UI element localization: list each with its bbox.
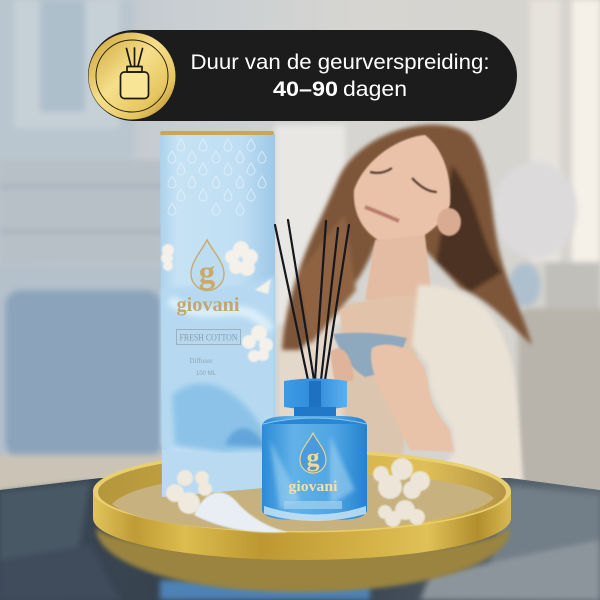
text line 2: duration: 40–90 [273,78,338,101]
hair [282,125,532,350]
volume text: 100 ML [196,371,217,377]
cotton balls right [373,458,430,527]
table [0,478,600,600]
outer wall [93,491,511,560]
sofa [0,265,600,495]
gold coin [88,32,176,120]
flowers and vase [493,162,577,307]
label box: fresh cotton: FRESH COTTON [180,332,238,342]
logo letter g on tube: g [199,255,216,291]
duration badge [88,30,517,121]
tube droplet pattern [168,139,266,215]
label box: fresh cotton [176,330,240,344]
logo droplet on bottle [300,433,326,473]
face, neck and hands [330,135,461,452]
banner pill [88,30,517,121]
cardigan and dress [278,295,425,470]
logo droplet on tube [191,240,224,291]
brand name on bottle: giovani [288,479,338,495]
tube rim [160,131,274,135]
rim [93,450,511,532]
cardboard tube: giovani fresh cotton [160,131,275,497]
cotton flowers on tube [161,241,273,362]
tray reflection [96,528,510,592]
reeds [275,220,349,380]
diffuser text: Diffuser [189,357,213,365]
diffuser bottle [262,378,367,521]
bottle label [284,501,342,509]
icon: reed diffuser [120,48,148,98]
bottle cap [284,378,347,410]
cotton balls left [166,470,212,514]
tray floor [112,474,494,531]
text line 2: unit: dagen [343,78,407,101]
gold tray [93,450,511,560]
cardigan front and sleeve [412,285,524,490]
text line 1: Duur van de geurverspreiding: [190,51,490,74]
woman with tea cup [278,125,532,490]
brand name on tube: giovani [176,294,240,316]
bottle neck [294,407,336,419]
bottle body [262,416,367,520]
inner wall [98,453,506,531]
feather [194,492,288,533]
logo letter g on bottle: g [306,443,320,472]
